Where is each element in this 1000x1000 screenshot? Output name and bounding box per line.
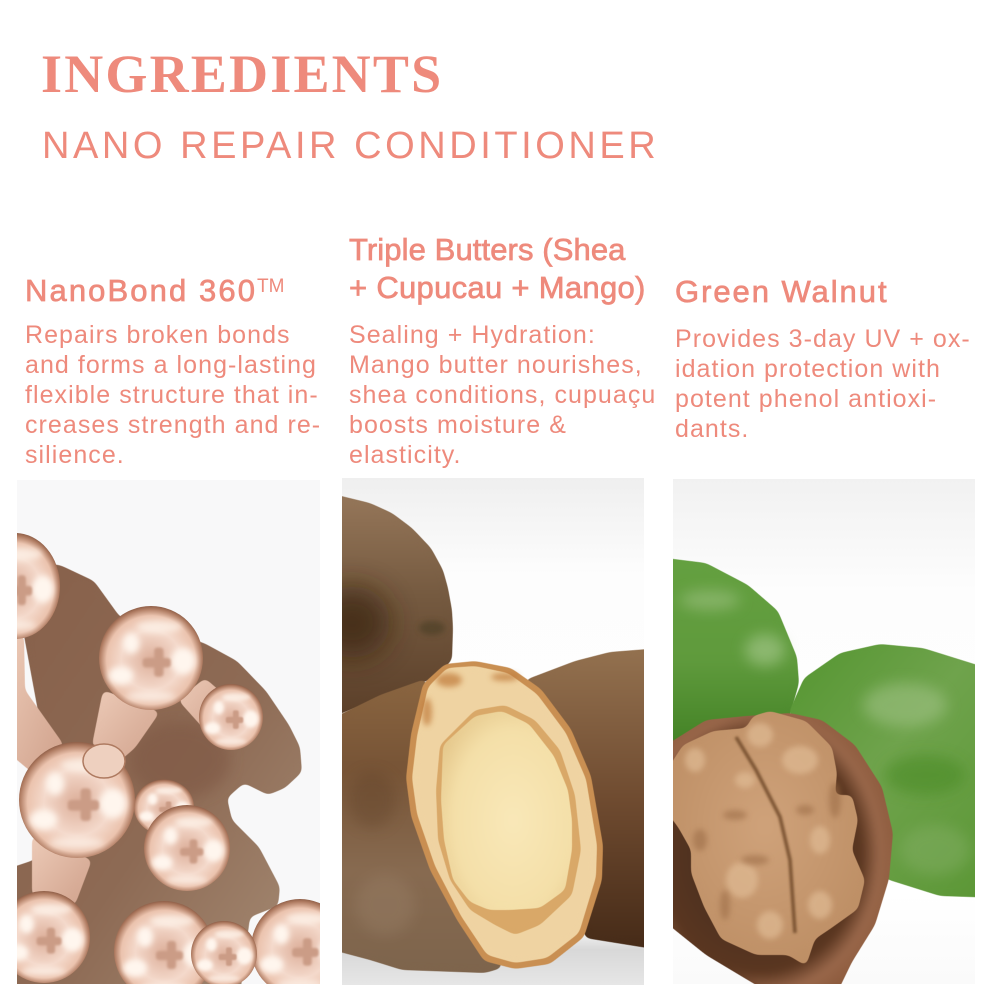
molecule: spheres [17,533,60,639]
heading: NanoBond: NanoBond 360TM [25,273,284,308]
text: Green Walnut: Provides 3-day UV + ox- [675,325,971,353]
text: NanoBond: silience. [25,441,125,469]
back nut right [528,649,644,948]
kernel [441,711,572,910]
text: NanoBond: flexible structure that in- [25,381,319,409]
cavity [436,705,581,935]
image: shea nuts [342,478,644,985]
shell rim [406,661,603,969]
molecule: connectors [17,638,216,903]
heading: Triple Butters [349,232,646,305]
text: NanoBond: and forms a long-lasting [25,351,317,379]
heading: Triple Butters: Triple Butters (Shea [349,232,626,267]
text: Green Walnut: dants. [675,415,749,443]
molecule shadow [10,560,302,995]
text: NanoBond [25,321,321,469]
rim inner [412,666,597,963]
heading: Green Walnut: Green Walnut [675,274,889,309]
subtitle: NANO REPAIR CONDITIONER [42,125,659,167]
text: Green Walnut: potent phenol antioxi- [675,385,937,413]
rim orange patches [422,673,519,726]
text: NanoBond: creases strength and re- [25,411,321,439]
darker shadow core [137,728,228,794]
text: Triple Butters: Sealing + Hydration: [349,321,596,349]
text: Triple Butters: boosts moisture & [349,411,567,439]
text: Green Walnut: idation protection with [675,355,941,383]
text: Triple Butters: elasticity. [349,441,462,469]
walnut kernel [665,711,865,966]
text: NanoBond: Repairs broken bonds [25,321,291,349]
text: Triple Butters: shea conditions, cupuaçu [349,381,656,409]
heading: Triple Butters: + Cupucau + Mango) [349,270,646,305]
image: green walnut [673,479,975,984]
open nut body [342,680,501,973]
image: nano molecules [17,533,320,984]
text: Green Walnut [675,325,971,443]
text: Triple Butters [349,321,656,469]
walnut shell [673,713,893,984]
green walnut left [673,558,799,741]
green walnut right [790,644,975,898]
title: INGREDIENTS [41,44,443,104]
back nut top [342,496,454,714]
text: Triple Butters: Mango butter nourishes, [349,351,643,379]
